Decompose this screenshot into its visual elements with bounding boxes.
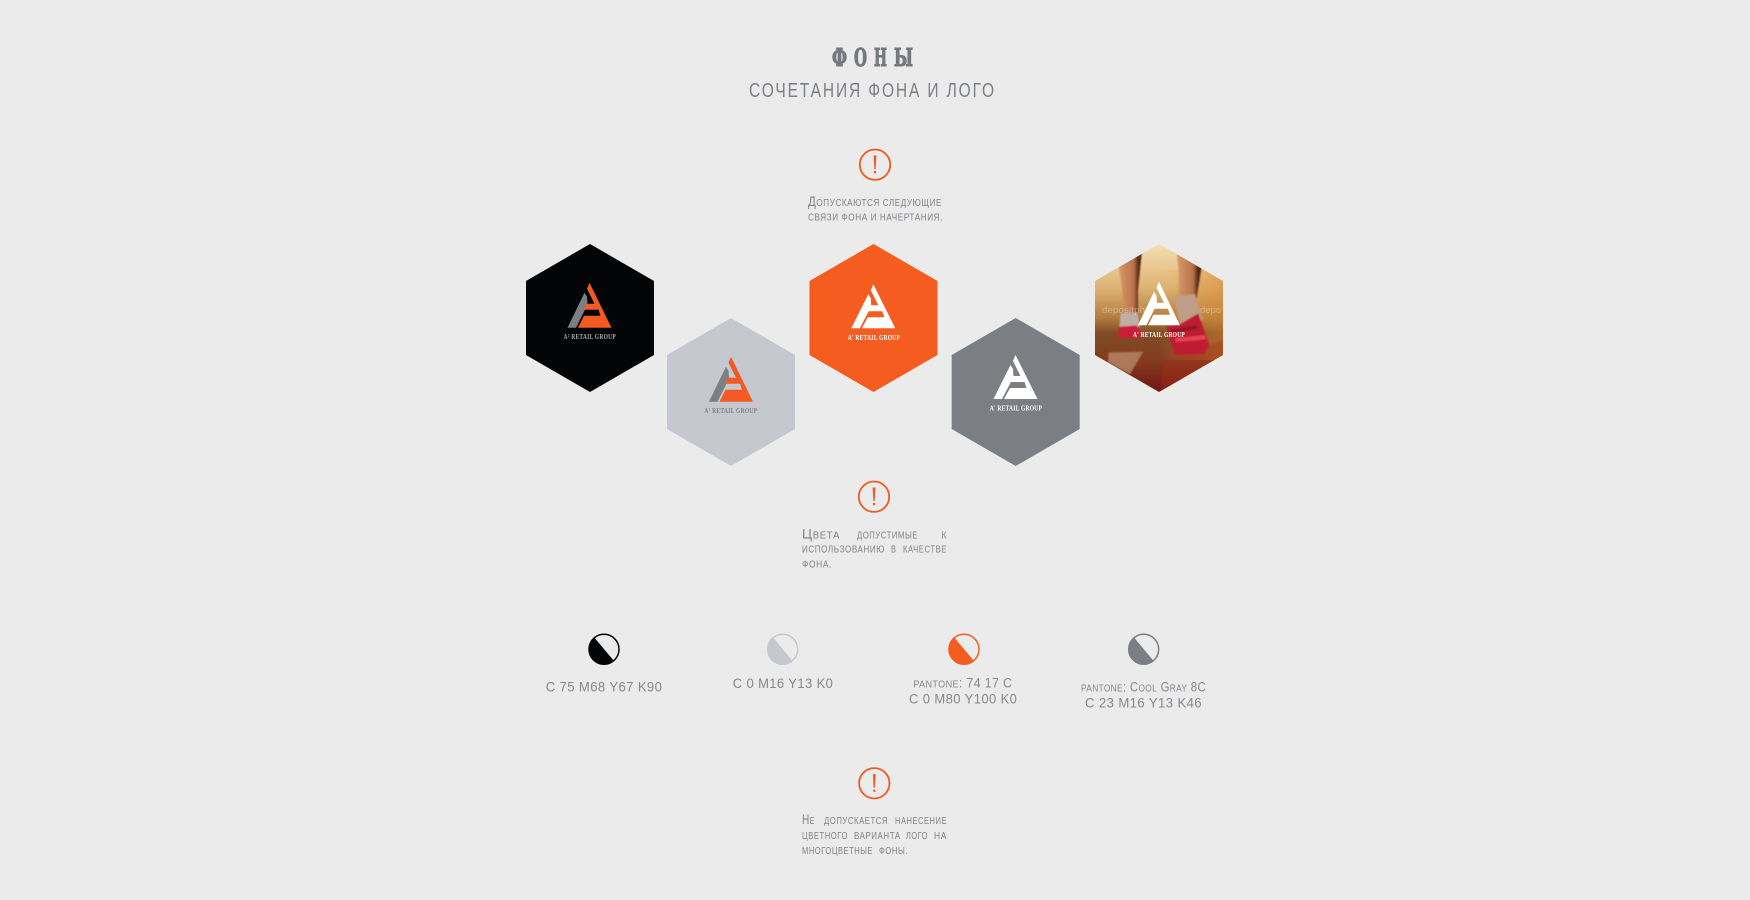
text block: allowed background colours: ИСПОЛЬЗОВАНИЮ	[802, 544, 885, 555]
text block: allowed background colours	[802, 525, 947, 570]
text block: allowed combinations: ДОПУСКАЮТСЯ СЛЕДУЮЩИЕ	[808, 193, 942, 209]
title: Н	[874, 43, 887, 72]
hexagon: photo background with running shoes	[1095, 244, 1223, 393]
swatch: black	[546, 634, 662, 695]
stock watermark: depo	[1200, 305, 1221, 316]
logo wordmark: A' RETAIL GROUP	[990, 405, 1042, 413]
title: О	[854, 43, 867, 72]
right shoe	[1174, 294, 1203, 325]
logo wordmark: A' RETAIL GROUP	[1133, 331, 1185, 339]
swatch label: PANTONE: 74 17 C	[913, 676, 1012, 691]
swatch label: C 0 M16 Y13 K0	[733, 676, 833, 691]
logo wordmark: A² RETAIL GROUP	[564, 333, 616, 341]
swatch label: C 0 M80 Y100 K0	[909, 691, 1017, 706]
swatch label: C 23 M16 Y13 K46	[1085, 695, 1202, 710]
swatch: light gray	[733, 634, 833, 691]
title: Ы	[894, 43, 913, 72]
logo wordmark: A' RETAIL GROUP	[848, 334, 900, 342]
text block: multicolour restriction: НА	[934, 831, 947, 842]
hexagon: orange background	[810, 244, 938, 392]
hexagon: dark gray background	[952, 318, 1080, 466]
text block: allowed background colours: К	[942, 530, 947, 541]
text block: multicolour restriction: НАНЕСЕНИЕ	[895, 816, 947, 827]
text block: multicolour restriction: ЦВЕТНОГО	[802, 831, 848, 842]
text block: multicolour restriction: ВАРИАНТА	[854, 831, 901, 842]
swatch label	[909, 676, 1017, 706]
logo: white on photo	[1138, 282, 1180, 325]
title: Ф	[832, 43, 847, 72]
logo: colour on light gray	[709, 357, 753, 402]
icon: exclamation 2	[859, 482, 889, 512]
logo wordmark: A² RETAIL GROUP	[704, 407, 758, 415]
right leg	[1177, 250, 1202, 298]
text block: allowed combinations	[808, 193, 943, 224]
text block: multicolour restriction: ФОНЫ.	[879, 846, 908, 857]
swatch label: C 75 M68 Y67 K90	[546, 680, 662, 695]
logo: white on orange	[851, 284, 895, 328]
subtitle: СОЧЕТАНИЯ ФОНА И ЛОГО	[749, 80, 996, 102]
logo: white on dark gray	[994, 355, 1038, 399]
text block: multicolour restriction	[802, 811, 947, 857]
text block: allowed background colours: ФОНА.	[802, 559, 832, 570]
text block: allowed background colours: ДОПУСТИМЫЕ	[857, 530, 918, 541]
stock watermark	[1102, 306, 1221, 315]
hexagon: light gray background	[667, 318, 795, 466]
icon: exclamation 1	[860, 150, 890, 180]
text block: multicolour restriction: НЕ	[802, 811, 815, 827]
text block: allowed combinations: СВЯЗИ ФОНА И НАЧЕРТАНИЯ.	[808, 213, 943, 224]
icon: exclamation 3	[859, 768, 890, 798]
title	[832, 43, 913, 72]
text block: allowed background colours: В	[891, 544, 896, 555]
swatch: orange	[909, 634, 1017, 706]
swatch: dark gray	[1081, 634, 1206, 710]
swatch label: PANTONE: COOL GRAY 8C	[1081, 680, 1206, 695]
hexagon: black background	[526, 244, 654, 392]
running track texture	[1108, 352, 1143, 374]
swatch label	[1081, 680, 1206, 710]
left shoe	[1119, 313, 1140, 327]
logo: colour on black	[568, 283, 612, 328]
stock watermark: depositph	[1102, 305, 1145, 316]
left leg	[1118, 250, 1142, 316]
text block: allowed background colours: КАЧЕСТВЕ	[903, 544, 947, 555]
text block: multicolour restriction: МНОГОЦВЕТНЫЕ	[802, 846, 873, 857]
text block: allowed background colours: ЦВЕТА	[802, 525, 840, 541]
text block: multicolour restriction: ЛОГО	[906, 831, 928, 842]
text block: multicolour restriction: ДОПУСКАЕТСЯ	[824, 816, 888, 827]
